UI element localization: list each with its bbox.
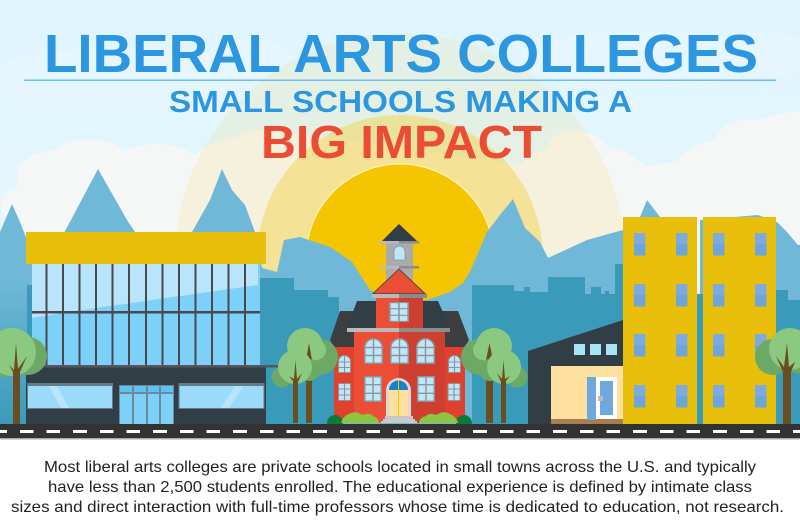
glass building bbox=[26, 232, 278, 424]
tree pair: left of school bbox=[272, 328, 338, 423]
left window bbox=[27, 383, 113, 409]
title: LIBERAL ARTS COLLEGES bbox=[44, 24, 758, 84]
front door bbox=[386, 378, 411, 416]
central gable tower bbox=[376, 298, 399, 328]
description: have less than 2,500 students enrolled. The educational experience is defined by intimate class bbox=[48, 479, 752, 496]
mansard roof bbox=[347, 301, 450, 328]
yellow roof bbox=[26, 232, 266, 264]
steps bbox=[381, 416, 417, 423]
subtitle emphasis: BIG IMPACT bbox=[261, 116, 542, 168]
title rule bbox=[24, 80, 776, 81]
road dashes bbox=[0, 430, 800, 433]
description: sizes and direct interaction with full-time professors whose time is dedicated to education, not research. bbox=[11, 499, 784, 516]
back roof bbox=[330, 311, 469, 347]
subtitle: SMALL SCHOOLS MAKING A bbox=[169, 84, 632, 119]
sun halo inner bbox=[257, 115, 543, 401]
faint high clouds bbox=[0, 32, 800, 112]
tree: left edge bbox=[0, 328, 47, 424]
bushes bbox=[327, 412, 472, 431]
tree: right edge bbox=[755, 328, 800, 424]
road bbox=[0, 424, 800, 438]
entrance doors bbox=[119, 385, 174, 424]
white caption panel bbox=[0, 438, 800, 532]
right window bbox=[178, 383, 264, 409]
arched windows bbox=[338, 338, 461, 373]
tree pair: right of school bbox=[461, 328, 528, 423]
rectangular windows bbox=[338, 376, 460, 402]
small windows bbox=[574, 344, 617, 355]
side wings bbox=[334, 347, 354, 423]
clouds bbox=[1, 112, 800, 300]
main block bbox=[354, 332, 399, 423]
sun halo outer bbox=[175, 33, 625, 483]
road edge bbox=[0, 438, 800, 440]
apartment windows bbox=[634, 233, 766, 408]
sun bbox=[306, 164, 494, 352]
door bbox=[587, 377, 617, 420]
red schoolhouse bbox=[327, 224, 472, 431]
city skyline bbox=[27, 264, 800, 424]
glass facade bbox=[32, 264, 260, 366]
description: Most liberal arts colleges are private schools located in small towns across the U.S. and typically bbox=[44, 459, 756, 476]
small dark building bbox=[528, 320, 623, 424]
bell tower bbox=[379, 224, 419, 283]
yellow apartment buildings bbox=[623, 217, 776, 424]
ground floor bbox=[26, 367, 266, 424]
left mountain shading bbox=[0, 280, 30, 425]
description bbox=[11, 459, 784, 516]
mountains bbox=[0, 169, 800, 305]
